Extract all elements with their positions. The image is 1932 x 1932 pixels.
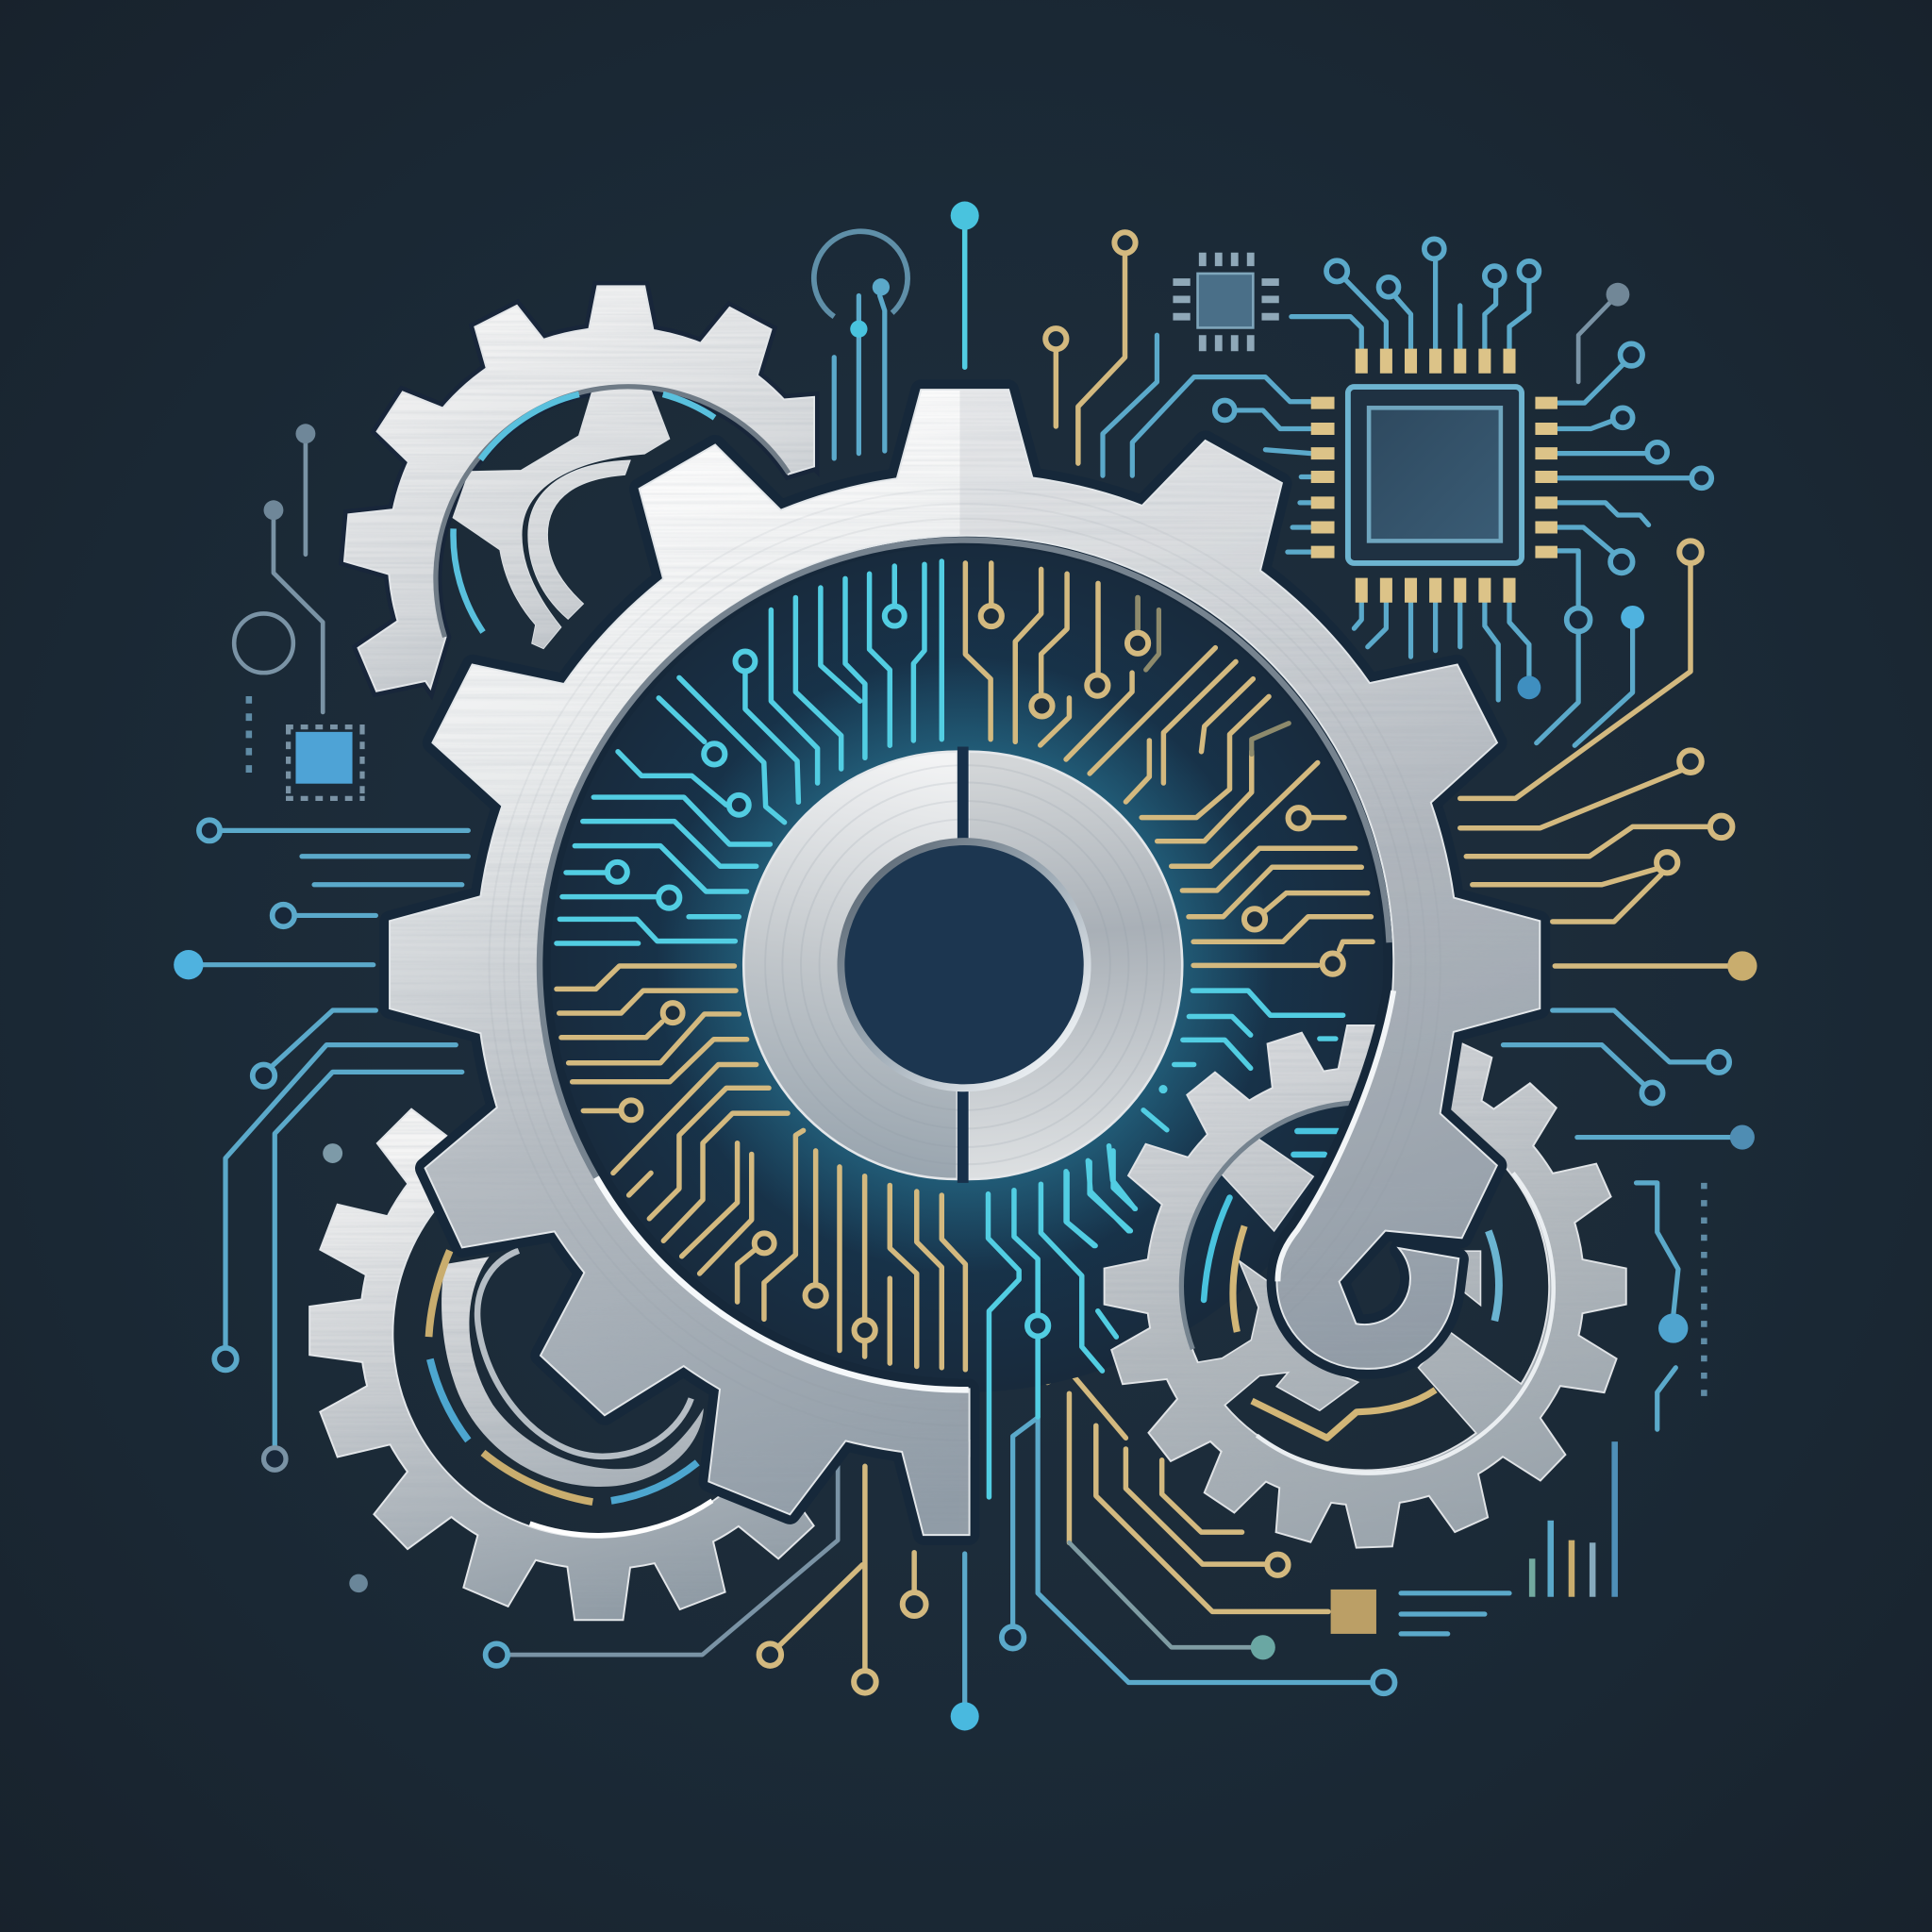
outer circuit traces: top (814, 202, 1311, 475)
gold traces upper right (965, 563, 1373, 965)
hub right half (969, 752, 1182, 1179)
central hub (743, 747, 1182, 1183)
gold traces lower left (557, 966, 965, 1370)
gold square terminal with lines (1331, 1590, 1509, 1634)
main microchip with traces (1265, 239, 1711, 745)
cyan traces upper left (557, 561, 941, 943)
outer circuit traces: bottom (486, 1371, 1395, 1730)
lower left gear (308, 1108, 815, 1621)
inner circuit board (537, 537, 1392, 1497)
small blue chip left (286, 727, 365, 798)
upper left gear (343, 285, 815, 692)
outer circuit traces: right (1460, 541, 1757, 1429)
hub centre hole (841, 841, 1088, 1088)
hub brushed rings (765, 765, 1164, 1164)
outer circuit traces: left (174, 424, 468, 1592)
hub gap (958, 747, 967, 1183)
small microchip top (1173, 253, 1279, 351)
bar chart bottom right (1529, 1441, 1618, 1597)
lower right gear (1104, 1024, 1627, 1549)
main large gear (389, 389, 1551, 1536)
cyan traces lower right (989, 991, 1343, 1497)
hub left half (743, 752, 958, 1179)
